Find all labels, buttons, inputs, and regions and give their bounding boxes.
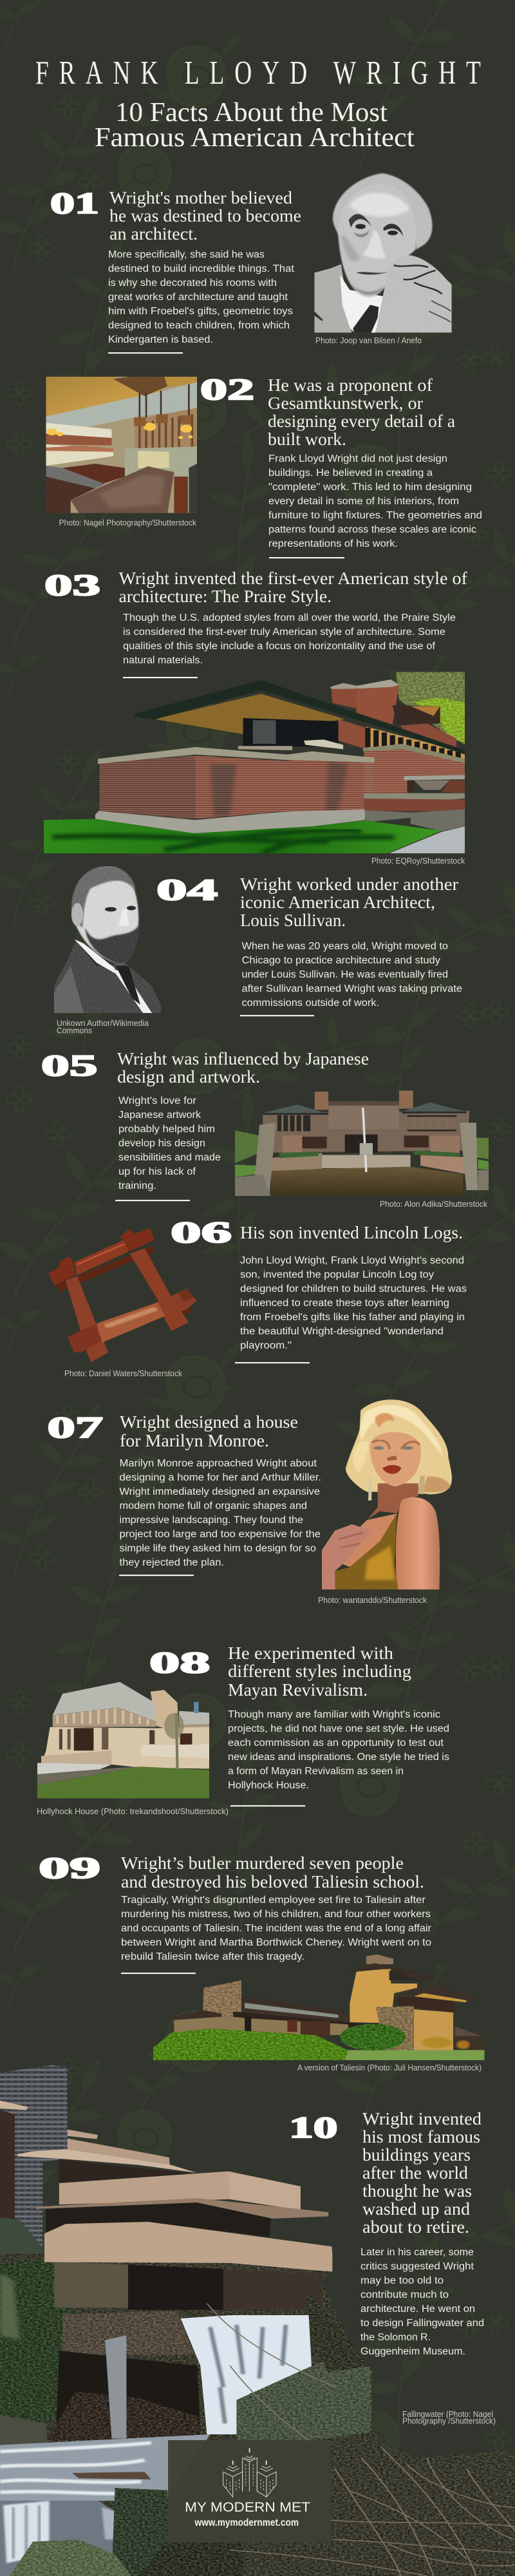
body text 10: may be too old to: [360, 2275, 444, 2286]
caption 04: Unkown Author/Wikimedia: [57, 1019, 149, 1028]
body text 02: representations of his work.: [268, 538, 398, 549]
panel: fact 02: [46, 373, 482, 558]
body text 07: designing a home for her and Arthur Miller.: [120, 1472, 321, 1483]
heading 01: Wright's mother believed: [109, 188, 293, 207]
caption 10: Fallingwater (Photo: Nagel: [402, 2410, 493, 2419]
body text 04: under Louis Sullivan. He was eventually fired: [242, 969, 448, 980]
heading 10: after the world: [362, 2163, 469, 2183]
photo: Imperial Hotel: [235, 1090, 489, 1196]
body text 10: to design Fallingwater and: [360, 2318, 484, 2329]
body text 04: commissions outside of work.: [242, 998, 379, 1009]
body text 08: Hollyhock House.: [228, 1780, 309, 1791]
body text 07: Marilyn Monroe approached Wright about: [120, 1458, 317, 1469]
heading 02: Gesamtkunstwerk, or: [268, 393, 423, 413]
body text 05: probably helped him: [118, 1124, 215, 1135]
body text 01: great works of architecture and taught: [108, 292, 288, 303]
body text 01: Kindergarten is based.: [108, 334, 213, 345]
body text 06: son, invented the popular Lincoln Log toy: [240, 1269, 434, 1280]
caption 09: A version of Taliesin (Photo: Juli Hansen/Shutterstock): [297, 2063, 482, 2072]
heading 04: Louis Sullivan.: [240, 911, 346, 930]
body text 03: qualities of this style include a focus on horizontality and the use of: [123, 641, 436, 652]
title: Frank Lloyd Wright: FRANK LLOYD WRIGHT: [35, 54, 481, 91]
body text 07: impressive landscaping. They found the: [120, 1515, 303, 1526]
number 08: 08: [149, 1646, 210, 1680]
number 05: 05: [41, 1049, 98, 1083]
heading 10: about to retire.: [362, 2217, 469, 2237]
body text 07: they rejected the plan.: [120, 1557, 224, 1568]
body text 10: Later in his career, some: [360, 2247, 474, 2258]
heading 07: Wright designed a house: [120, 1412, 298, 1432]
body text 07: modern home full of organic shapes and: [120, 1501, 307, 1511]
caption 03: Photo: EQRoy/Shutterstock: [371, 857, 465, 866]
body text 03: is considered the first-ever truly American style of architecture. Some: [123, 627, 445, 638]
body text 08: Though many are familiar with Wright's iconic: [228, 1709, 440, 1720]
heading 01: [109, 188, 301, 243]
photo: portrait of Frank Lloyd Wright: [314, 173, 452, 333]
caption 07: Photo: wantanddo/Shutterstock: [318, 1596, 427, 1605]
panel: fact 10: [289, 2109, 496, 2425]
body text 01: destined to build incredible things. That: [108, 263, 295, 274]
body text 05: sensibilities and made: [118, 1152, 221, 1163]
heading 02: built work.: [268, 430, 346, 449]
panel: fact 09: [39, 1852, 485, 2072]
body text 03: [123, 612, 456, 666]
body text 05: [118, 1095, 221, 1191]
heading 10: thought he was: [362, 2181, 472, 2201]
heading 02: [268, 375, 455, 449]
body text 08: new ideas and inspirations. One style he tried is: [228, 1752, 449, 1763]
body text 08: [228, 1709, 449, 1791]
body text 02: buildings. He believed in creating a: [268, 468, 433, 478]
body text 10: Guggenheim Museum.: [360, 2346, 465, 2357]
panel: fact 04: [54, 866, 462, 1036]
photo: portrait of Louis Sullivan: [54, 866, 161, 1013]
heading 08: Mayan Revivalism.: [228, 1680, 368, 1700]
body text 04: Chicago to practice architecture and study: [242, 955, 440, 966]
caption 04: Commons: [57, 1027, 92, 1036]
number 04: 04: [156, 873, 218, 907]
heading 06: His son invented Lincoln Logs.: [240, 1223, 463, 1242]
icon: three towers logo: [223, 2448, 276, 2497]
panel: fact 01: [50, 173, 452, 354]
photo: Hollyhock House: [37, 1682, 209, 1799]
body text 09: murdering his mistress, two of his children, and four other workers: [121, 1909, 431, 1920]
body text 09: rebuild Taliesin twice after this tragedy.: [121, 1951, 304, 1962]
body text 08: projects, he did not have one set style. He used: [228, 1723, 449, 1734]
caption 04: [57, 1019, 149, 1036]
number 06: 06: [171, 1216, 232, 1249]
number 01: 01: [50, 187, 99, 220]
body text 06: the beautiful Wright-designed "wonderland: [240, 1326, 444, 1337]
heading 08: different styles including: [228, 1662, 411, 1681]
body text 06: [240, 1255, 467, 1351]
caption 06: Photo: Daniel Waters/Shutterstock: [64, 1369, 183, 1378]
caption 10: [402, 2410, 496, 2425]
heading 10: his most famous: [362, 2127, 480, 2146]
body text 02: furniture to light fixtures. The geometries and: [268, 510, 482, 521]
body text 01: More specifically, she said he was: [108, 249, 265, 260]
caption 08: Hollyhock House (Photo: trekandshoot/Shutterstock): [37, 1807, 229, 1816]
heading 04: iconic American Architect,: [240, 893, 435, 912]
number 03: 03: [44, 569, 100, 602]
heading 09: Wright’s butler murdered seven people: [121, 1853, 404, 1873]
panel: fact 07: [48, 1399, 452, 1605]
body text 04: When he was 20 years old, Wright moved to: [242, 941, 448, 952]
heading 05: Wright was influenced by Japanese: [117, 1049, 369, 1068]
photo: Fallingwater with waterfall and forest: [0, 2065, 515, 2576]
body text 09: Tragically, Wright's disgruntled employee set fire to Taliesin after: [121, 1895, 426, 1906]
subtitle: Famous American Architect: [95, 123, 415, 153]
body text 02: patterns found across these scales are iconic: [268, 524, 476, 535]
number 09: 09: [39, 1852, 100, 1885]
body text 01: [108, 249, 295, 345]
body text 09: and occupants of Taliesin. The incident was the end of a long affair: [121, 1923, 431, 1934]
body text 07: Wright immediately designed an expansive: [120, 1486, 320, 1497]
photo: Lincoln Logs toy: [48, 1228, 197, 1362]
body text 02: "complete" work. This led to him designing: [268, 482, 472, 493]
heading 08: [228, 1643, 411, 1700]
heading 09: [121, 1853, 424, 1891]
panel: fact 05: [41, 1049, 489, 1209]
panel: fact 03: [44, 569, 467, 866]
heading 04: Wright worked under another: [240, 875, 458, 894]
body text 05: develop his design: [118, 1138, 205, 1149]
body text 02: every detail in some of his interiors, from: [268, 496, 459, 507]
body text 08: each commission as an opportunity to test out: [228, 1738, 444, 1748]
heading 03: Wright invented the first-ever American style of: [118, 569, 467, 588]
body text 02: Frank Lloyd Wright did not just design: [268, 453, 447, 464]
heading 02: designing every detail of a: [268, 412, 455, 431]
heading 10: buildings years: [362, 2145, 471, 2164]
body text 02: [268, 453, 482, 549]
body text 08: a form of Mayan Revivalism as seen in: [228, 1766, 404, 1777]
heading 09: and destroyed his beloved Taliesin school.: [121, 1872, 424, 1891]
body text 10: [360, 2247, 484, 2357]
body text 04: after Sullivan learned Wright was taking private: [242, 983, 462, 994]
body text 07: [120, 1458, 321, 1568]
body text 04: [242, 941, 462, 1009]
body text 10: contribute much to: [360, 2289, 449, 2300]
heading 10: Wright invented: [362, 2109, 482, 2128]
body text 05: up for his lack of: [118, 1166, 196, 1177]
caption 02: Photo: Nagel Photography/Shutterstock: [59, 518, 197, 527]
heading 01: he was destined to become: [109, 206, 301, 225]
body text 06: playroom.": [240, 1340, 292, 1351]
subtitle: 10 Facts About the Most: [115, 98, 388, 128]
body text 05: training.: [118, 1180, 156, 1191]
caption 10: Photography /Shutterstock): [402, 2416, 496, 2425]
heading 05: design and artwork.: [117, 1067, 260, 1086]
heading 08: He experimented with: [228, 1643, 394, 1663]
photo: church interior: [46, 377, 197, 513]
panel: fact 08: [37, 1643, 449, 1816]
caption 01: Photo: Joop van Bilsen / Anefo: [315, 336, 422, 345]
body text 09: [121, 1895, 431, 1962]
body text 03: natural materials.: [123, 655, 203, 666]
heading 07: [120, 1412, 298, 1450]
body text 07: simple life they asked him to design for so: [120, 1543, 316, 1554]
heading 03: architecture: The Praire Style.: [118, 587, 332, 606]
body text 06: designed for children to build structures. He was: [240, 1283, 467, 1294]
heading 10: [362, 2109, 482, 2237]
heading 03: [118, 569, 467, 606]
caption 05: Photo: Alon Adika/Shutterstock: [380, 1200, 488, 1209]
body text 10: architecture. He went on: [360, 2304, 475, 2315]
heading 10: washed up and: [362, 2199, 471, 2219]
body text 09: between Wright and Martha Borthwick Cheney. Wright went on to: [121, 1937, 431, 1948]
heading 02: He was a proponent of: [268, 375, 433, 395]
photo: Taliesin: [153, 1955, 485, 2060]
heading 04: [240, 875, 458, 930]
body text 07: project too large and too expensive for the: [120, 1529, 321, 1540]
heading 01: an architect.: [109, 224, 198, 243]
photo: Marilyn Monroe: [322, 1399, 452, 1589]
body text 06: from Froebel's gifts like his father and playing in: [240, 1312, 465, 1323]
body text 01: is why she decorated his rooms with: [108, 278, 277, 289]
panel: fact 06: [48, 1216, 467, 1378]
body text 03: Though the U.S. adopted styles from all over the world, the Praire Style: [123, 612, 456, 623]
subtitle: [95, 98, 415, 153]
body text 01: him with Froebel's gifts, geometric toys: [108, 306, 293, 317]
number 07: 07: [48, 1411, 103, 1444]
number 10: 10: [289, 2111, 337, 2145]
heading 05: [117, 1049, 369, 1086]
body text 01: designed to teach children, from which: [108, 320, 290, 331]
body text 05: Japanese artwork: [118, 1110, 201, 1121]
body text 05: Wright's love for: [118, 1095, 196, 1106]
brand name: MY MODERN MET: [185, 2500, 310, 2515]
body text 10: the Solomon R.: [360, 2332, 431, 2343]
number 02: 02: [200, 373, 254, 406]
logo panel: My Modern Met: [168, 2440, 331, 2543]
heading 07: for Marilyn Monroe.: [120, 1431, 269, 1450]
body text 06: John Lloyd Wright, Frank Lloyd Wright's second: [240, 1255, 464, 1266]
website: www.mymodernmet.com: [194, 2517, 299, 2528]
photo: Robie House: [44, 672, 465, 853]
body text 06: influenced to create these toys after learning: [240, 1298, 449, 1309]
body text 10: critics suggested Wright: [360, 2261, 474, 2272]
